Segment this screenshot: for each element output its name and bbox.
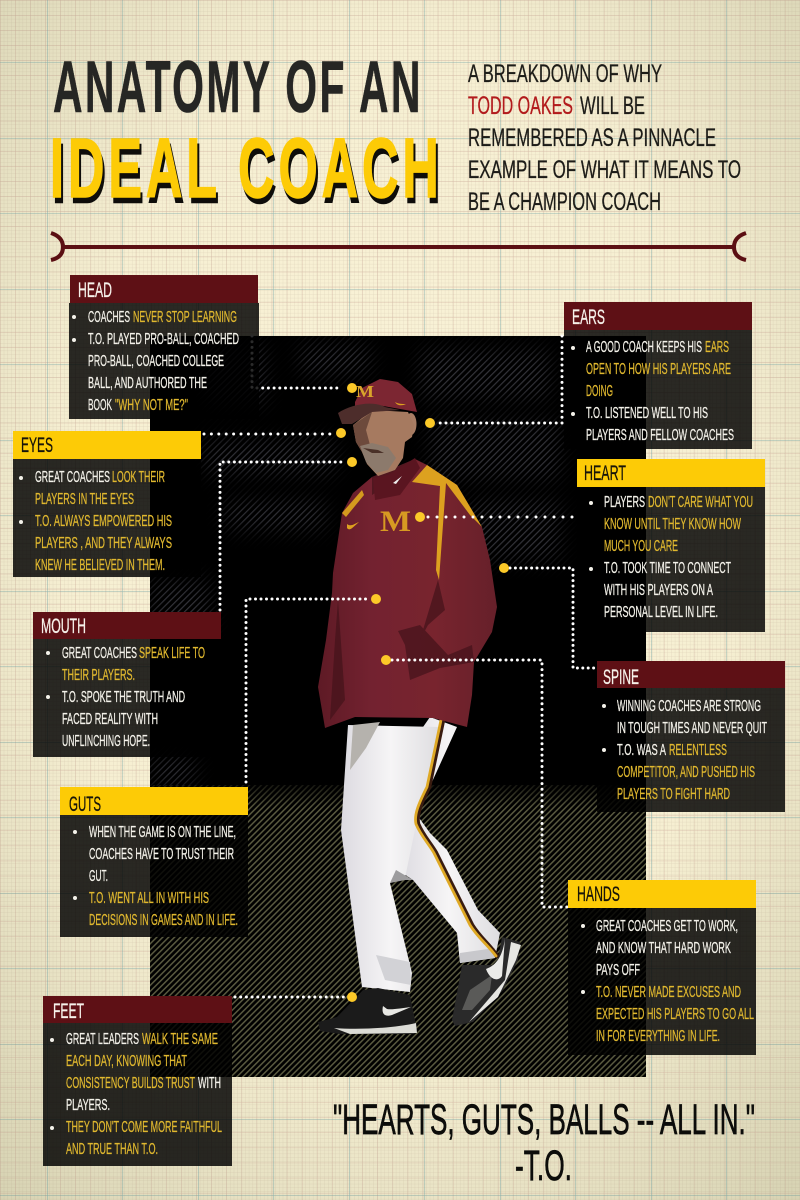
panel: head: NEVER STOP LEARNING [133, 309, 237, 326]
panel: mouth: FACED REALITY WITH [62, 711, 158, 728]
panel: head [69, 275, 259, 419]
connector: ears [436, 336, 562, 423]
cap logo: M [356, 382, 374, 401]
panel: heart [577, 459, 765, 632]
beard [360, 443, 396, 473]
panel: guts: GUTS [69, 793, 101, 816]
title [50, 45, 441, 221]
panel: feet: EACH DAY, KNOWING THAT [66, 1053, 187, 1070]
coach figure [318, 379, 521, 1034]
panel: guts: T.O. WENT ALL IN WITH HIS [89, 890, 209, 907]
subtitle text block: BE A CHAMPION COACH [468, 188, 661, 216]
connector: mouth [246, 599, 370, 782]
panel: feet: FEET [53, 1000, 84, 1023]
connector: mouth to eyes label [220, 462, 344, 610]
back leg [398, 717, 500, 963]
marker pins [336, 383, 509, 1002]
panel: guts: COACHES HAVE TO TRUST THEIR [89, 846, 234, 863]
central black photo panel [150, 336, 646, 1077]
panel: mouth: THEIR PLAYERS. [62, 667, 135, 684]
panel: head: BOOK [88, 397, 112, 414]
panel: head: HEAD [78, 279, 112, 302]
chest logo: M [380, 505, 411, 538]
panel: spine: RELENTLESS [669, 742, 727, 759]
jacket shadows [330, 459, 474, 720]
panel: feet: THEY DON'T COME MORE FAITHFUL [66, 1119, 222, 1136]
panel: head: BALL, AND AUTHORED THE [88, 375, 207, 392]
panel: head: PRO-BALL, COACHED COLLEGE [88, 353, 224, 370]
cap [355, 379, 417, 412]
title line two: IDEAL COACH [50, 121, 439, 215]
mouth [363, 448, 384, 453]
connector: heart [428, 516, 573, 518]
quote [333, 1096, 755, 1190]
panel: ears [564, 302, 752, 449]
face shadow [353, 412, 372, 452]
panel: ears: EARS [705, 339, 729, 356]
panel: feet: GREAT LEADERS [66, 1031, 139, 1048]
panel: mouth: SPEAK LIFE TO [139, 645, 205, 662]
panel: feet: WITH [198, 1075, 221, 1092]
panel: head: T.O. PLAYED PRO-BALL, COACHED [88, 331, 239, 348]
collar [373, 458, 420, 500]
right shoe [452, 937, 520, 1026]
neck and face [353, 410, 414, 476]
connector: feet [235, 996, 345, 998]
panel: mouth: T.O. SPOKE THE TRUTH AND [62, 689, 185, 706]
connectors [204, 336, 597, 1002]
panel: hands [568, 880, 756, 1055]
subtitle text block: TODD OAKES [468, 92, 573, 120]
panel: heart: WITH HIS PLAYERS ON A [604, 582, 713, 599]
panel: eyes: KNEW HE BELIEVED IN THEM. [35, 557, 165, 574]
panel: heart: HEART [584, 462, 626, 485]
subtitle text block: WILL BE [580, 92, 645, 120]
panel: heart: MUCH YOU CARE [604, 538, 678, 555]
connector: eyes [204, 432, 332, 436]
panel: ears: EARS [572, 306, 605, 329]
jacket [318, 459, 497, 728]
front leg [341, 725, 440, 992]
shoulder yoke [412, 465, 482, 580]
panel: eyes: LOOK THEIR [112, 469, 165, 486]
subtitle text block [468, 60, 741, 216]
pant stripe [415, 720, 497, 956]
panel: head: "WHY NOT ME?" [115, 397, 188, 414]
connector: spine [510, 568, 597, 668]
cap swoosh [395, 402, 406, 405]
connector: head [252, 336, 342, 388]
panel: ears: T.O. LISTENED WELL TO HIS [586, 405, 708, 422]
panel: mouth [33, 612, 221, 757]
panel: mouth: MOUTH [41, 615, 86, 638]
panel: feet: WALK THE SAME [142, 1031, 218, 1048]
divider with bracket ends [51, 233, 746, 260]
title line two: IDEAL COACH [52, 126, 441, 221]
panel: mouth: UNFLINCHING HOPE. [62, 733, 150, 750]
panel: eyes [13, 431, 201, 577]
panel: guts [60, 787, 248, 937]
subtitle text block: A BREAKDOWN OF WHY [468, 60, 662, 88]
panel: guts: WHEN THE GAME IS ON THE LINE, [89, 824, 236, 841]
left shoulder piping [342, 490, 364, 517]
panel: eyes: EYES [21, 434, 53, 457]
panel: eyes: GREAT COACHES [35, 469, 110, 486]
panel: spine: T.O. WAS A [617, 742, 666, 759]
panel: feet: AND TRUE THAN T.O. [66, 1141, 158, 1158]
ear [406, 413, 416, 435]
panel: head: COACHES [88, 309, 130, 326]
left shoe [318, 988, 417, 1034]
panel: eyes: PLAYERS , AND THEY ALWAYS [35, 535, 172, 552]
panel: feet: PLAYERS. [66, 1097, 110, 1114]
panel: eyes: PLAYERS IN THE EYES [35, 491, 134, 508]
panel: guts: GUT. [89, 868, 108, 885]
cap brim [338, 404, 400, 424]
panel: ears: DOING [586, 383, 613, 400]
panel: hands: HANDS [577, 883, 620, 906]
panel: spine: SPINE [603, 666, 639, 689]
panel: feet [43, 996, 232, 1166]
panel: heart: PLAYERS [604, 494, 645, 511]
panel: feet: CONSISTENCY BUILDS TRUST [66, 1075, 195, 1092]
panel: guts: DECISIONS IN GAMES AND IN LIFE. [89, 912, 238, 929]
panel: hands: PAYS OFF [596, 962, 640, 979]
panel: eyes: T.O. ALWAYS EMPOWERED HIS [35, 513, 172, 530]
panel: ears: A GOOD COACH KEEPS HIS [586, 339, 702, 356]
connector: hands [392, 660, 568, 907]
jacket swoosh [347, 522, 359, 529]
title line one: ANATOMY OF AN [53, 45, 420, 128]
panel: mouth: GREAT COACHES [62, 645, 137, 662]
quote: -T.O. [515, 1142, 572, 1190]
panel: spine [597, 661, 785, 812]
